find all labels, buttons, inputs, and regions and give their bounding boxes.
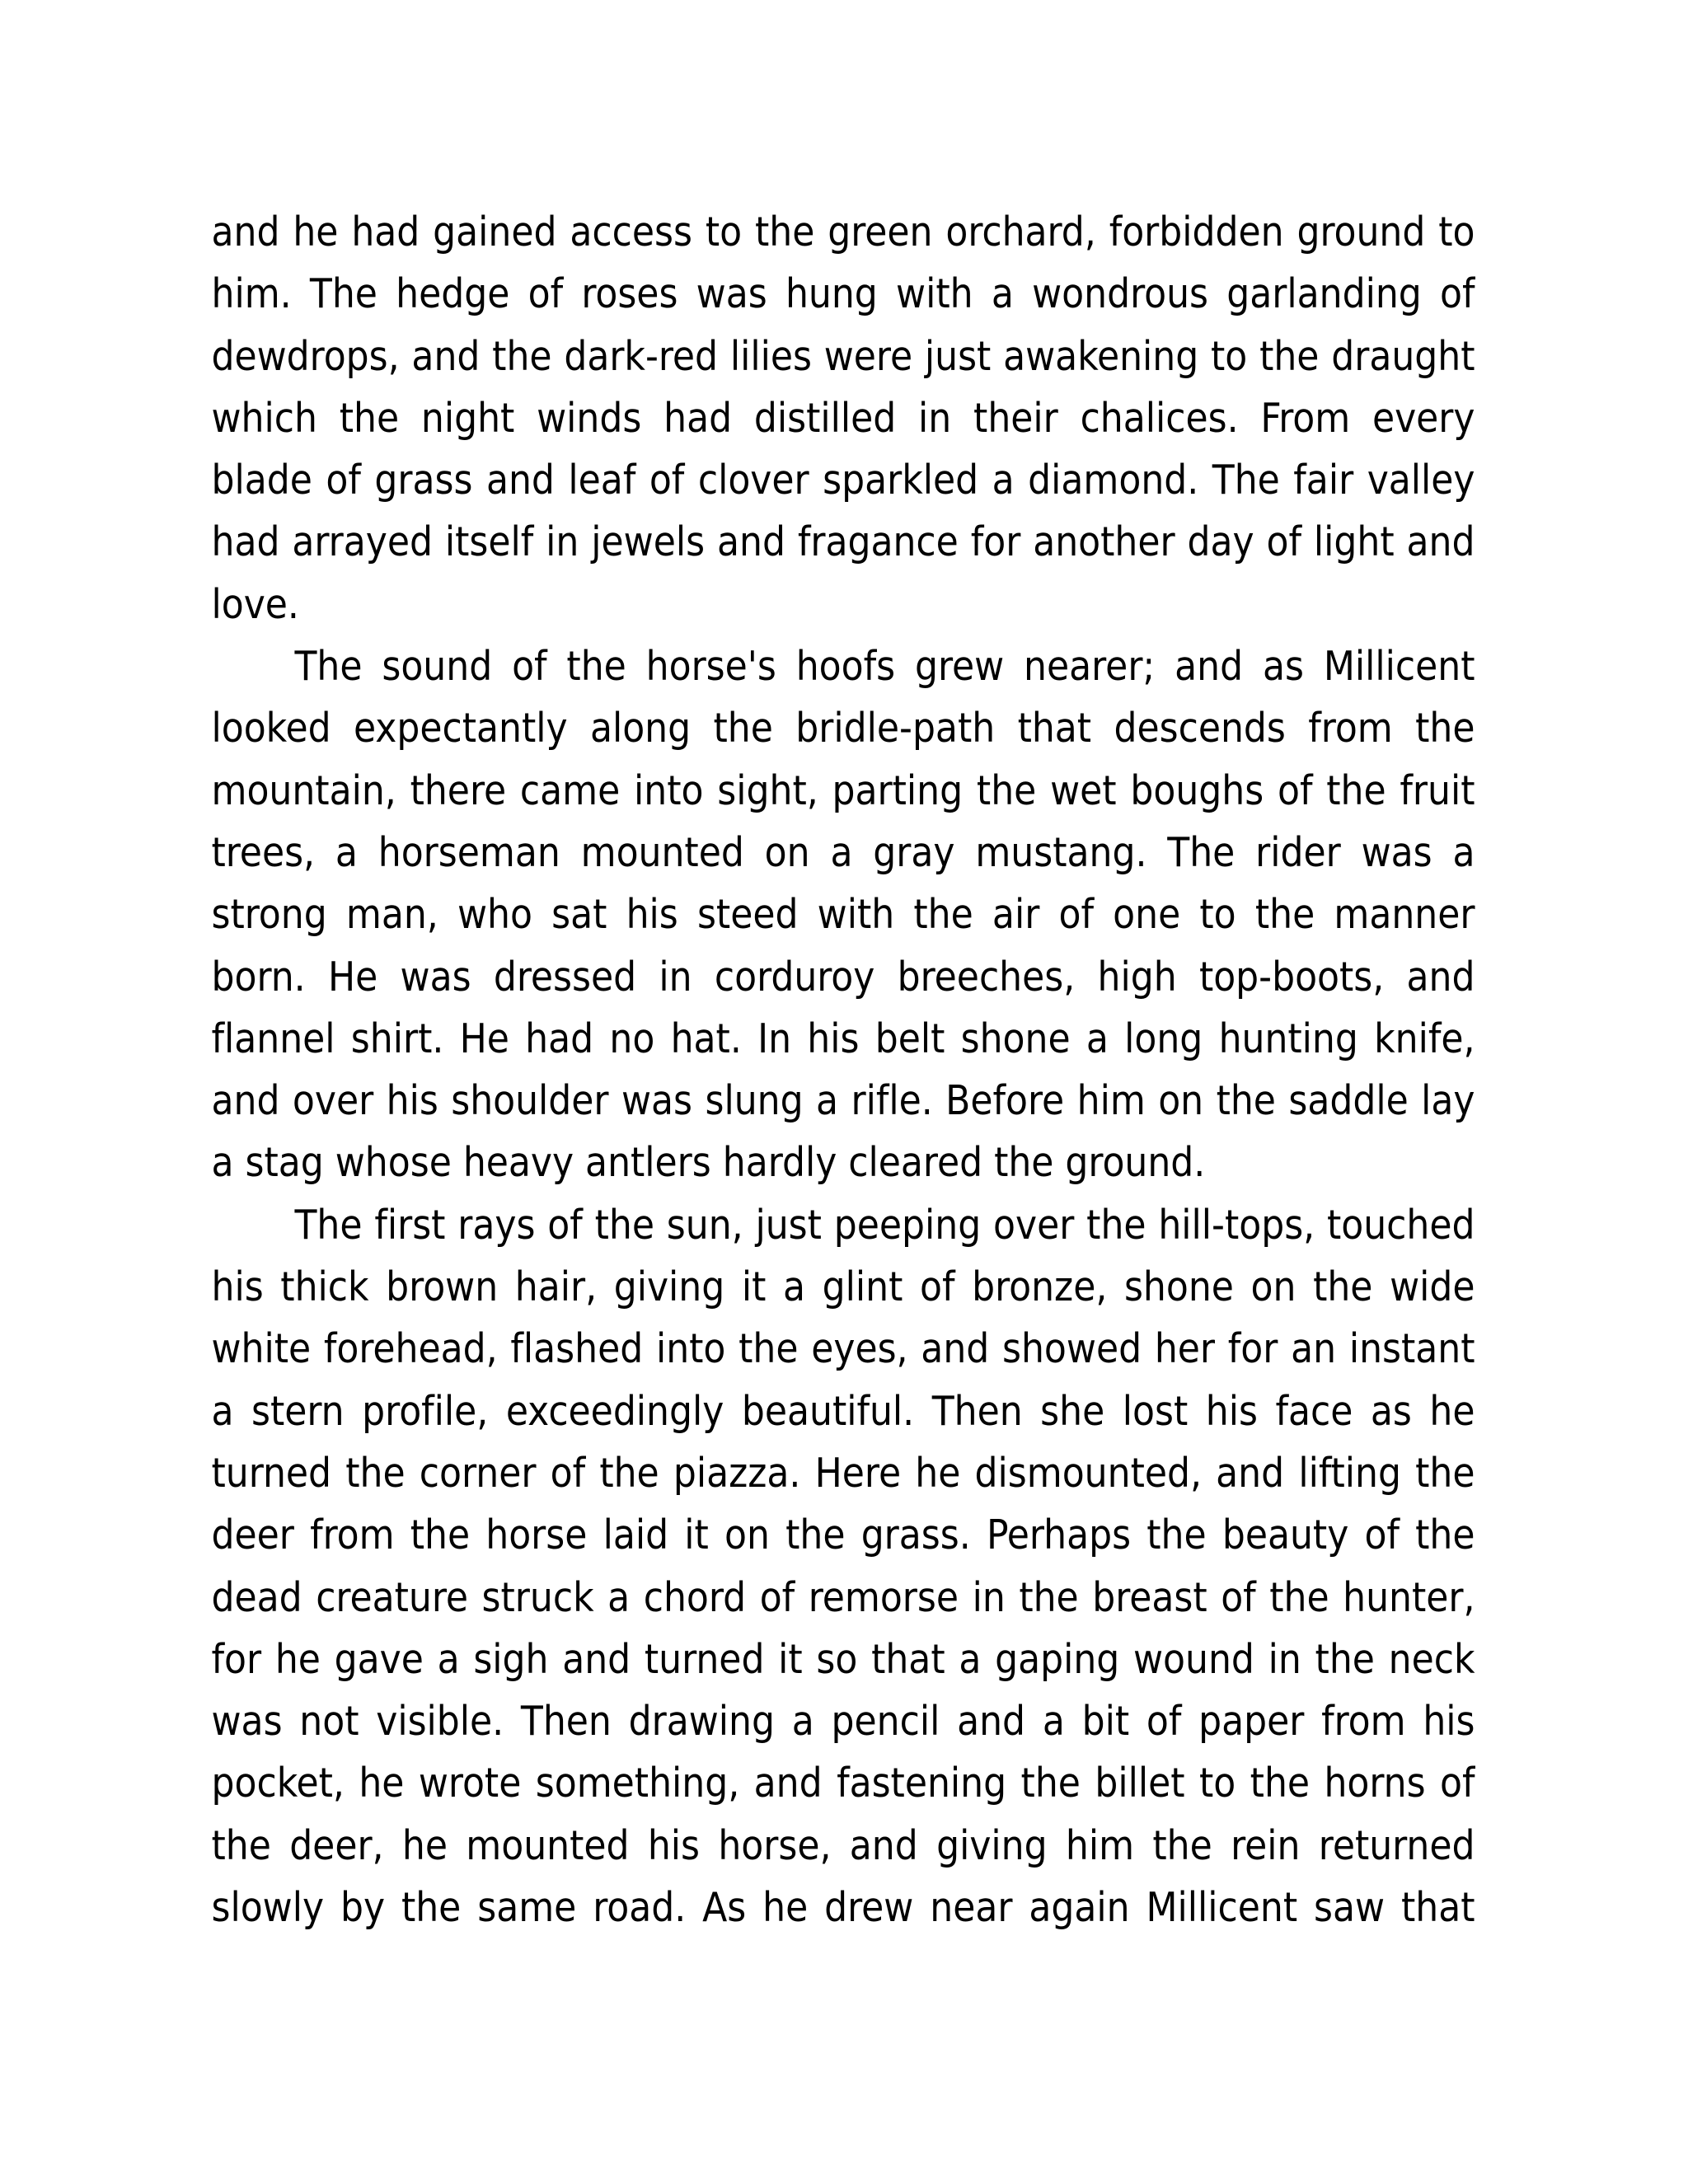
text block: paragraph 1: and he had gained access to the green orchard, forbidden ground to bbox=[211, 209, 1475, 255]
text block: paragraph 3: slowly by the same road. As he drew near again Millicent saw that bbox=[211, 1884, 1475, 1931]
text block: paragraph 3: pocket, he wrote something, and fastening the billet to the horns of bbox=[211, 1760, 1475, 1807]
text block: paragraph 1 bbox=[211, 209, 1475, 628]
text block: paragraph 3: the deer, he mounted his horse, and giving him the rein returned bbox=[211, 1822, 1475, 1869]
text block: paragraph 2 bbox=[211, 643, 1475, 1186]
text block: paragraph 2: flannel shirt. He had no hat. In his belt shone a long hunting knife, bbox=[211, 1015, 1475, 1062]
text block: paragraph 1: him. The hedge of roses was hung with a wondrous garlanding of bbox=[211, 270, 1475, 317]
text block: paragraph 2: trees, a horseman mounted on a gray mustang. The rider was a bbox=[211, 829, 1475, 876]
text block: paragraph 3: was not visible. Then drawing a pencil and a bit of paper from his bbox=[211, 1698, 1475, 1745]
text block: paragraph 2: mountain, there came into sight, parting the wet boughs of the fruit bbox=[211, 767, 1475, 814]
text block: paragraph 1: had arrayed itself in jewels and fragance for another day of light and bbox=[211, 518, 1475, 565]
text block: paragraph 3: The first rays of the sun, just peeping over the hill-tops, touched bbox=[295, 1202, 1475, 1249]
text block: paragraph 2: and over his shoulder was slung a rifle. Before him on the saddle lay bbox=[211, 1077, 1475, 1124]
text block: paragraph 3: white forehead, flashed into the eyes, and showed her for an instant bbox=[211, 1325, 1475, 1372]
text block: paragraph 3: his thick brown hair, giving it a glint of bronze, shone on the wide bbox=[211, 1263, 1475, 1310]
text block: paragraph 1: love. bbox=[211, 581, 299, 628]
text block: paragraph 3: dead creature struck a chord of remorse in the breast of the hunter, bbox=[211, 1574, 1475, 1621]
text block: paragraph 3: deer from the horse laid it on the grass. Perhaps the beauty of the bbox=[211, 1511, 1475, 1558]
text block: paragraph 3: turned the corner of the piazza. Here he dismounted, and lifting the bbox=[211, 1450, 1475, 1497]
text block: paragraph 1: blade of grass and leaf of clover sparkled a diamond. The fair valley bbox=[211, 457, 1475, 504]
text block: paragraph 2: The sound of the horse's hoofs grew nearer; and as Millicent bbox=[295, 643, 1475, 690]
text block: paragraph 2: strong man, who sat his steed with the air of one to the manner bbox=[211, 891, 1475, 938]
text block: paragraph 3 bbox=[211, 1202, 1475, 1931]
text block: paragraph 1: dewdrops, and the dark-red lilies were just awakening to the draught bbox=[211, 333, 1475, 380]
text block: paragraph 3: for he gave a sigh and turned it so that a gaping wound in the neck bbox=[211, 1636, 1475, 1683]
text block: paragraph 3: a stern profile, exceedingly beautiful. Then she lost his face as he bbox=[211, 1388, 1475, 1435]
text block: paragraph 1: which the night winds had distilled in their chalices. From every bbox=[211, 395, 1475, 442]
text block: paragraph 2: looked expectantly along the bridle-path that descends from the bbox=[211, 705, 1475, 752]
text block: paragraph 2: a stag whose heavy antlers hardly cleared the ground. bbox=[211, 1139, 1205, 1186]
text block: paragraph 2: born. He was dressed in corduroy breeches, high top-boots, and bbox=[211, 954, 1475, 1001]
